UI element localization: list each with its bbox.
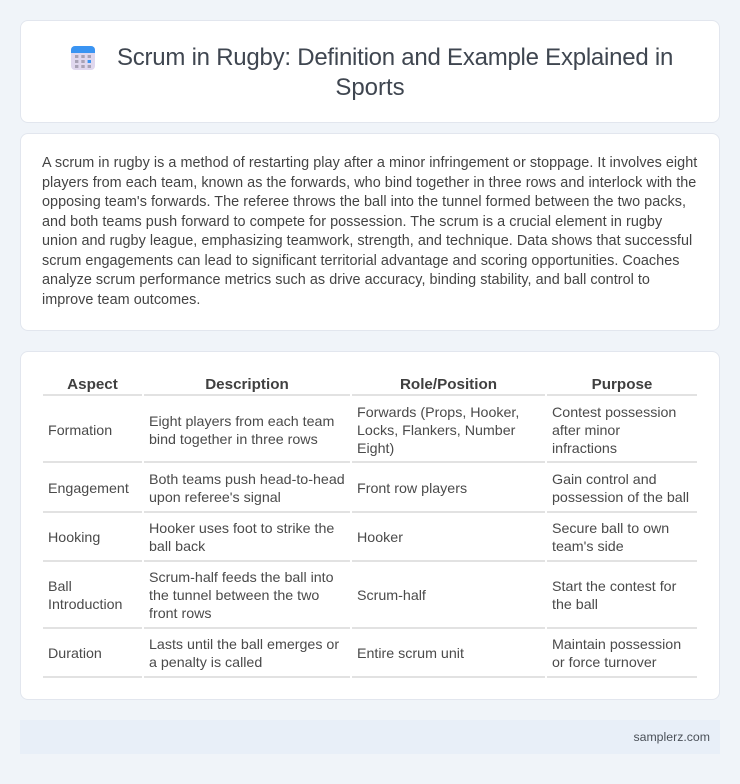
row: Formation: infractions — [552, 441, 617, 457]
row: Duration: Maintain possession — [552, 637, 681, 653]
text block: definition: improve team outcomes. — [42, 292, 200, 308]
table header: Aspect — [67, 376, 118, 393]
row: Duration: Entire scrum unit — [357, 646, 464, 662]
text block: definition: and both teams push forward to compete for possession. The scrum is a crucial element in rugby — [42, 214, 662, 230]
row: Formation: after minor — [552, 423, 620, 439]
header panel — [20, 20, 720, 123]
row: Ball Introduction: the ball — [552, 597, 598, 613]
row: Duration: Duration — [48, 646, 102, 662]
footer bar — [20, 720, 720, 754]
row: Duration: a penalty is called — [149, 655, 262, 671]
text block: definition: A scrum in rugby is a method of restarting play after a minor infringement or stoppage. It involves eight — [42, 155, 697, 171]
row: Hooking: Hooking — [48, 530, 100, 546]
text block: definition: union and rugby league, emphasizing teamwork, strength, and technique. Data shows that successful — [42, 233, 692, 249]
row: Ball Introduction: Scrum-half — [357, 588, 426, 604]
table header: Purpose — [592, 376, 652, 393]
row: Duration: Lasts until the ball emerges or — [149, 637, 339, 653]
row: Hooking: Secure ball to own — [552, 521, 669, 537]
panel: definition — [20, 133, 720, 331]
footer text: samplerz.com — [633, 730, 710, 744]
row: Formation: Eight) — [357, 441, 394, 457]
row: Ball Introduction: Ball — [48, 579, 72, 595]
row: Formation: Eight players from each team — [149, 414, 334, 430]
table header: Role/Position — [400, 376, 497, 393]
row: Formation: Formation — [48, 423, 112, 439]
row: Engagement: Both teams push head-to-head — [149, 472, 345, 488]
table header — [67, 376, 652, 393]
row: Engagement: upon referee's signal — [149, 490, 281, 506]
row: Ball Introduction: front rows — [149, 606, 212, 622]
row: Formation — [48, 405, 676, 457]
row: Hooking — [48, 521, 669, 555]
row: Duration: or force turnover — [552, 655, 657, 671]
title: Scrum in Rugby: Definition and Example Explained in — [117, 44, 673, 71]
row: Engagement: Gain control and — [552, 472, 657, 488]
row: Engagement: Engagement — [48, 481, 129, 497]
row: Hooking: ball back — [149, 539, 205, 555]
row: Engagement: Front row players — [357, 481, 467, 497]
row: Ball Introduction: Introduction — [48, 597, 122, 613]
table header: Description — [205, 376, 289, 393]
text block: definition: opposing team's forwards. The referee throws the ball into the tunnel formed between the two packs, — [42, 194, 686, 210]
row: Ball Introduction: Start the contest for — [552, 579, 676, 595]
row: Hooking: Hooker uses foot to strike the — [149, 521, 334, 537]
row: Hooking: Hooker — [357, 530, 403, 546]
row: Formation: Contest possession — [552, 405, 676, 421]
row: Formation: Forwards (Props, Hooker, — [357, 405, 519, 421]
panel: table — [20, 351, 720, 700]
text block: definition — [42, 155, 698, 308]
icon: calendar — [71, 46, 95, 70]
row: Ball Introduction: the tunnel between the two — [149, 588, 319, 604]
text block: definition: players from each team, known as the forwards, who bind together in three rows and interlock with the — [42, 175, 696, 191]
row: Formation: bind together in three rows — [149, 432, 318, 448]
title — [117, 44, 673, 101]
row: Ball Introduction: Scrum-half feeds the ball into — [149, 570, 334, 586]
title: Sports — [335, 74, 405, 101]
row: Hooking: team's side — [552, 539, 624, 555]
row: Formation: Locks, Flankers, Number — [357, 423, 515, 439]
text block: definition: analyze scrum performance metrics such as drive accuracy, binding stability, and ball control to — [42, 272, 650, 288]
row: Duration — [48, 637, 681, 671]
row: Engagement — [48, 472, 689, 506]
row: Engagement: possession of the ball — [552, 490, 689, 506]
text block: definition: scrum engagements can lead to significant territorial advantage and scoring opportunities. Coaches — [42, 253, 679, 269]
row: Ball Introduction — [48, 570, 676, 622]
